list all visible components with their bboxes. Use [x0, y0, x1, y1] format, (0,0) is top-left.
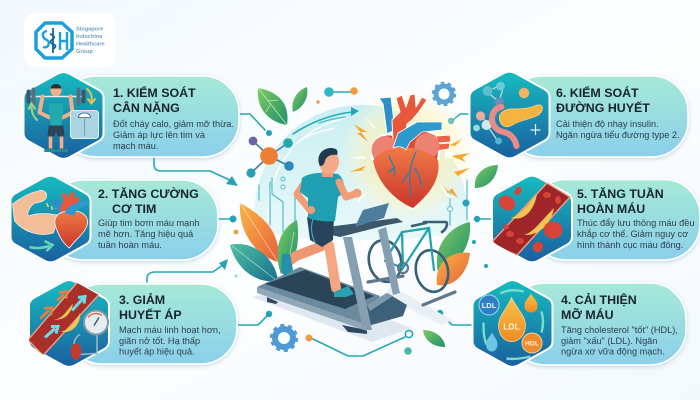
description: giảm "xấu" (LDL). Ngăn	[561, 336, 657, 346]
icon: pancreas and molecules	[470, 72, 550, 158]
connector lines	[147, 114, 492, 356]
logo: Singapore Indochina Healthcare Group: Singapore	[76, 26, 103, 32]
icon: cholesterol drops: LDL	[503, 322, 520, 332]
heading: 2. TĂNG CƯỜNG	[98, 186, 199, 201]
icon: molecule left	[246, 137, 294, 178]
icon: cholesterol drops: HDL	[525, 340, 539, 348]
description: Thúc đẩy lưu thông máu đều	[577, 218, 694, 228]
leaves: right cluster	[437, 222, 488, 285]
logo: Singapore Indochina Healthcare Group: Indochina	[76, 34, 103, 40]
heading: HUYẾT ÁP	[119, 307, 182, 322]
panel 6: Kiểm soát đường huyết	[470, 72, 688, 158]
logo: Singapore Indochina Healthcare Group	[24, 13, 116, 67]
icon: flexed arm and heart	[10, 176, 90, 262]
icon: weightlifter and scale	[24, 72, 104, 159]
icon: gear top	[433, 83, 455, 105]
heart glow and rays	[340, 87, 476, 223]
panel 4: Cải thiện mỡ máu	[472, 280, 686, 367]
description: hình thành cục máu đông.	[577, 240, 683, 250]
icon: cholesterol drops	[472, 280, 552, 367]
heading: CÂN NẶNG	[113, 100, 180, 115]
heading: HOÀN MÁU	[577, 201, 645, 216]
heading: 1. KIỂM SOÁT	[113, 85, 196, 100]
description: giãn nở tốt. Hạ thấp	[119, 336, 200, 346]
heading: 5. TĂNG TUẦN	[577, 186, 664, 201]
leaves: top	[258, 87, 498, 347]
description: Đốt cháy calo, giảm mỡ thừa.	[113, 119, 234, 129]
description: ngừa xơ vữa động mạch.	[561, 346, 665, 356]
runner figure	[281, 148, 361, 297]
heading: MỠ MÁU	[561, 307, 614, 322]
logo: Singapore Indochina Healthcare Group: Group	[76, 49, 93, 55]
heading: 3. GIẢM	[119, 292, 165, 307]
description: khắp cơ thể. Giảm nguy cơ	[577, 229, 688, 239]
icon: small molecule top	[316, 87, 358, 104]
big heart illustration	[372, 94, 451, 208]
panel 1: Kiểm soát cân nặng	[24, 72, 239, 159]
panel 5: Tăng tuần hoàn máu	[490, 176, 700, 262]
description: mẽ hơn. Tăng hiệu quả	[98, 229, 194, 239]
heading: 6. KIỂM SOÁT	[556, 85, 639, 100]
icon: artery and blood pressure gauge	[28, 280, 109, 367]
description: Cải thiện độ nhạy insulin.	[556, 119, 659, 129]
panel 2: Tăng cường cơ tim	[10, 176, 218, 262]
background arch behind runner	[254, 105, 470, 240]
description: tuần hoàn máu.	[98, 240, 162, 250]
icon: blood vessel and red cells	[490, 176, 572, 262]
description: mạch máu.	[113, 141, 158, 151]
icon: treadmill	[257, 203, 407, 334]
logo: Singapore Indochina Healthcare Group: Healthcare	[76, 42, 105, 48]
leaves: left cluster	[230, 203, 298, 281]
heading: ĐƯỜNG HUYẾT	[556, 100, 650, 115]
heading: CƠ TIM	[112, 202, 156, 216]
panel 3: Giảm huyết áp	[28, 280, 237, 367]
heading: 4. CẢI THIỆN	[561, 292, 637, 307]
description: Ngăn ngừa tiểu đường type 2.	[556, 130, 680, 140]
description: Giúp tim bơm máu mạnh	[98, 218, 200, 228]
description: Giảm áp lực lên tim và	[113, 130, 206, 140]
floor shadow	[252, 285, 452, 342]
arrow: curved motion arrow over arch	[293, 107, 359, 140]
description: Mạch máu linh hoạt hơn,	[119, 325, 221, 335]
icon: stationary bike	[365, 222, 455, 305]
icon: cholesterol drops: LDL	[482, 301, 497, 310]
description: huyết áp hiệu quả.	[119, 346, 195, 356]
icon: gear bottom	[271, 325, 297, 351]
description: Tăng cholesterol "tốt" (HDL),	[561, 325, 678, 335]
